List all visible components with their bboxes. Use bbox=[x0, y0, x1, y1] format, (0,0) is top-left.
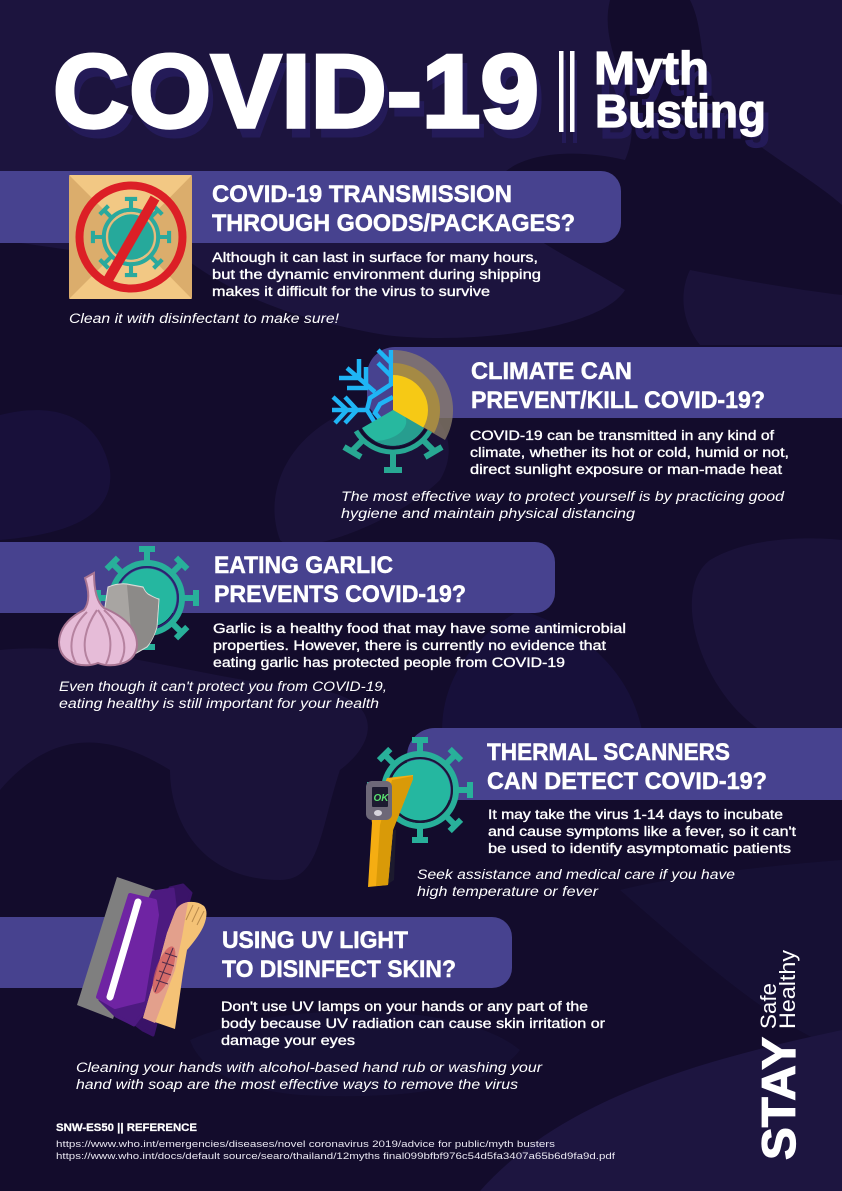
body text 1: but the dynamic environment during shipping bbox=[212, 267, 541, 282]
body text 4: be used to identify asymptomatic patients bbox=[488, 841, 791, 856]
slogan: stay safe healthy: Safe bbox=[756, 983, 781, 1029]
panel: thermal scanners bbox=[366, 728, 842, 899]
banner 2 bbox=[367, 347, 842, 418]
heading 1: COVID-19 TRANSMISSION bbox=[212, 181, 512, 208]
body text 2 bbox=[470, 428, 789, 477]
banner 4 bbox=[407, 728, 842, 800]
reference block: SNW-ES50 || REFERENCE bbox=[56, 1122, 197, 1134]
body text 1: Although it can last in surface for many hours, bbox=[212, 250, 538, 265]
icon: snowflake, sun and virus bbox=[332, 350, 453, 470]
tip 4 bbox=[417, 867, 735, 899]
panel: climate bbox=[332, 347, 842, 521]
title: Myth Busting: Busting bbox=[595, 85, 766, 137]
body text 3: properties. However, there is currently no evidence that bbox=[213, 638, 606, 653]
heading 4 bbox=[487, 739, 767, 795]
banner 5 bbox=[0, 917, 512, 988]
heading 5 bbox=[222, 927, 456, 983]
title: COVID-19: COVID-19 bbox=[58, 43, 544, 159]
tip 4: Seek assistance and medical care if you have bbox=[417, 867, 735, 882]
icon: garlic with shield and virus bbox=[59, 549, 196, 665]
panel: UV light bbox=[0, 877, 606, 1092]
body text 3: eating garlic has protected people from COVID-19 bbox=[213, 655, 565, 670]
heading 4: THERMAL SCANNERS bbox=[487, 739, 730, 766]
icon: UV lamp and irritated arm bbox=[77, 877, 206, 1035]
body text 4 bbox=[488, 807, 796, 856]
slogan: stay safe healthy: STAY bbox=[752, 1037, 805, 1160]
slogan: stay safe healthy bbox=[752, 950, 805, 1160]
title: Myth Busting: Myth bbox=[594, 42, 709, 94]
reference block bbox=[56, 1122, 615, 1162]
icon: package with crossed-out virus bbox=[69, 175, 192, 299]
body text 3 bbox=[213, 621, 626, 670]
tip 2 bbox=[341, 489, 785, 521]
panel: goods and packages bbox=[0, 171, 621, 326]
title: Myth Busting: Busting bbox=[600, 96, 771, 148]
body text 3: Garlic is a healthy food that may have some antimicrobial bbox=[213, 621, 626, 636]
body text 2: direct sunlight exposure or man-made heat bbox=[470, 462, 782, 477]
body text 1: makes it difficult for the virus to survive bbox=[212, 284, 490, 299]
tip 3: eating healthy is still important for your health bbox=[59, 696, 379, 711]
tip 2: hygiene and maintain physical distancing bbox=[341, 506, 636, 521]
reference block: https://www.who.int/emergencies/diseases/novel coronavirus 2019/advice for public/myth busters bbox=[56, 1139, 555, 1150]
banner 3 bbox=[0, 542, 555, 613]
heading 2: CLIMATE CAN bbox=[471, 358, 632, 385]
heading 1 bbox=[212, 181, 575, 237]
title: Myth Busting bbox=[594, 42, 771, 148]
icon: thermal scanner and virus bbox=[366, 740, 470, 887]
body text 5 bbox=[221, 999, 606, 1048]
tip 2: The most effective way to protect yourself is by practicing good bbox=[341, 489, 785, 504]
heading 5: USING UV LIGHT bbox=[222, 927, 408, 954]
body text 2: COVID-19 can be transmitted in any kind of bbox=[470, 428, 774, 443]
heading 3 bbox=[214, 552, 466, 608]
heading 2: PREVENT/KILL COVID-19? bbox=[471, 387, 765, 414]
icon: thermal scanner and virus: OK bbox=[374, 793, 389, 804]
heading 3: PREVENTS COVID-19? bbox=[214, 581, 466, 608]
tip 3: Even though it can't protect you from COVID-19, bbox=[59, 679, 387, 694]
body text 5: Don't use UV lamps on your hands or any part of the bbox=[221, 999, 588, 1014]
tip 4: high temperature or fever bbox=[417, 884, 599, 899]
panel: garlic bbox=[0, 542, 626, 711]
heading 5: TO DISINFECT SKIN? bbox=[222, 956, 456, 983]
body text 4: It may take the virus 1-14 days to incubate bbox=[488, 807, 783, 822]
tip 3 bbox=[59, 679, 387, 711]
banner 1 bbox=[0, 171, 621, 243]
body text 5: damage your eyes bbox=[221, 1033, 355, 1048]
title: Myth Busting: Myth bbox=[599, 53, 714, 105]
title divider bars bbox=[559, 51, 577, 143]
body text 1 bbox=[212, 250, 541, 299]
tip 5 bbox=[76, 1060, 543, 1092]
tip 5: hand with soap are the most effective ways to remove the virus bbox=[76, 1077, 518, 1092]
tip 1: Clean it with disinfectant to make sure! bbox=[69, 311, 339, 326]
heading 3: EATING GARLIC bbox=[214, 552, 393, 579]
body text 5: body because UV radiation can cause skin irritation or bbox=[221, 1016, 606, 1031]
slogan: stay safe healthy: Healthy bbox=[775, 950, 800, 1029]
body text 2: climate, whether its hot or cold, humid or not, bbox=[470, 445, 789, 460]
heading 2 bbox=[471, 358, 765, 414]
tip 5: Cleaning your hands with alcohol-based hand rub or washing your bbox=[76, 1060, 543, 1075]
reference block: https://www.who.int/docs/default source/searo/thailand/12myths final099bfbf976c54d5fa3407a65b6d9fa9d.pdf bbox=[56, 1151, 615, 1162]
body text 4: and cause symptoms like a fever, so it can't bbox=[488, 824, 796, 839]
heading 4: CAN DETECT COVID-19? bbox=[487, 768, 767, 795]
title: COVID-19: COVID-19 bbox=[53, 34, 539, 150]
heading 1: THROUGH GOODS/PACKAGES? bbox=[212, 210, 575, 237]
